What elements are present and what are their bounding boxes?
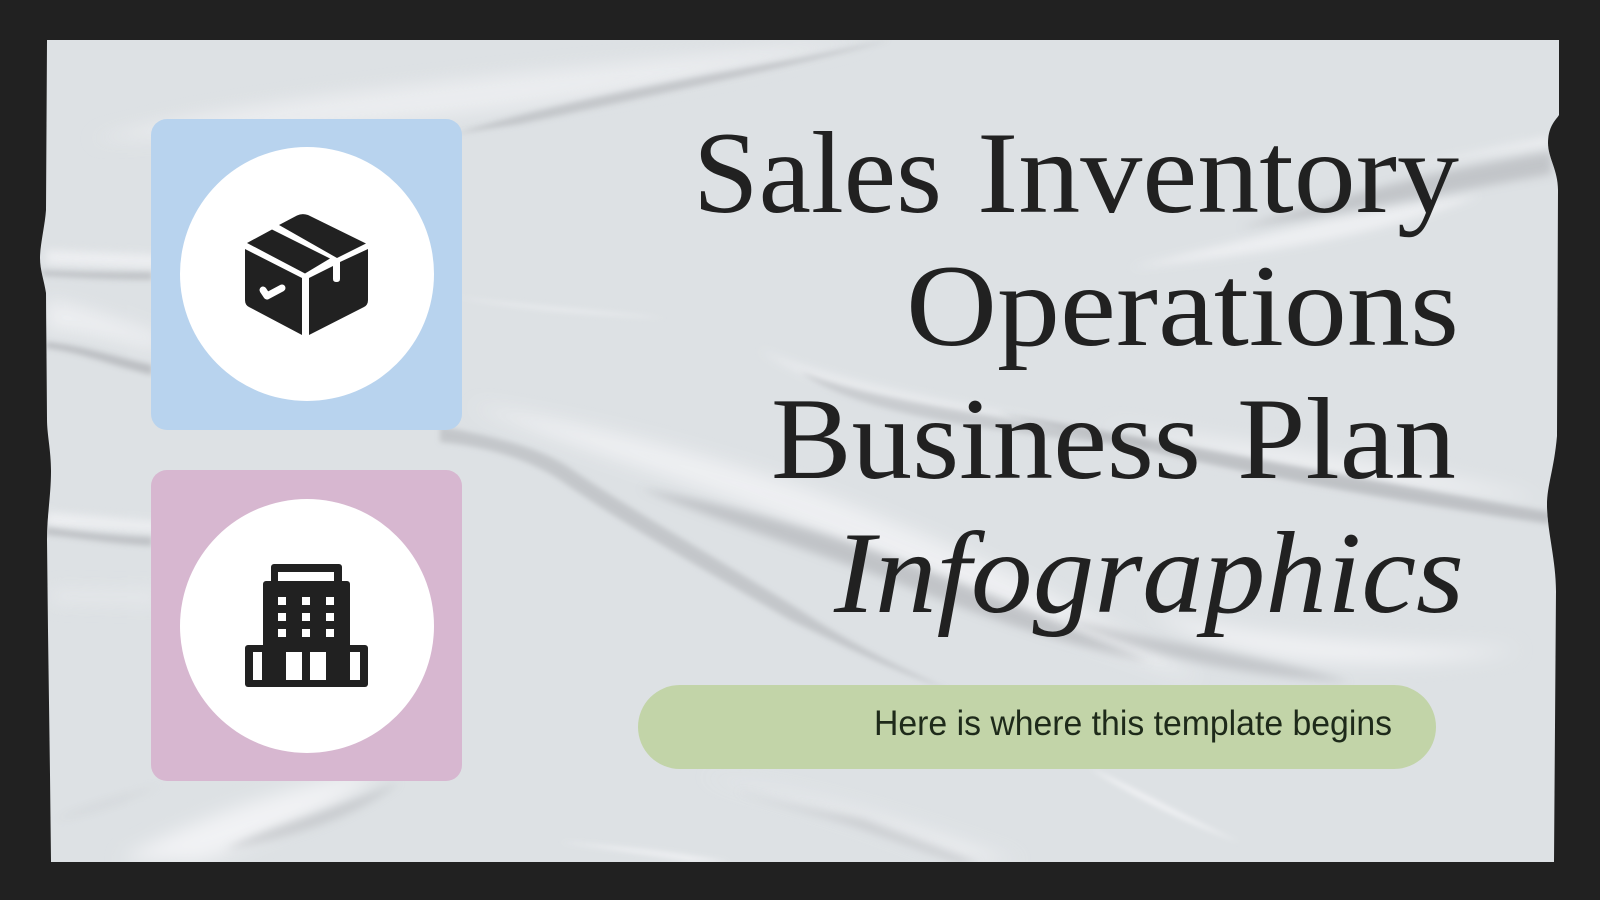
icon: cardboard box with check mark bbox=[245, 214, 368, 335]
title: Inventory bbox=[977, 109, 1460, 238]
title: Business bbox=[771, 375, 1201, 504]
pink card background bbox=[151, 470, 462, 781]
white circle bbox=[180, 147, 434, 401]
title: Sales bbox=[693, 109, 942, 238]
title: Plan bbox=[1237, 375, 1456, 504]
subtitle text: Here is where this template begins bbox=[874, 704, 1392, 743]
title bbox=[693, 109, 1464, 638]
title: Operations bbox=[906, 242, 1459, 371]
panel: pink operations card bbox=[151, 470, 462, 781]
panel: blue inventory card bbox=[151, 119, 462, 430]
icon: office building bbox=[245, 564, 368, 687]
white circle bbox=[180, 499, 434, 753]
subtitle pill bbox=[638, 685, 1436, 769]
blue card background bbox=[151, 119, 462, 430]
title: Infographics bbox=[833, 509, 1464, 638]
green pill background bbox=[638, 685, 1436, 769]
